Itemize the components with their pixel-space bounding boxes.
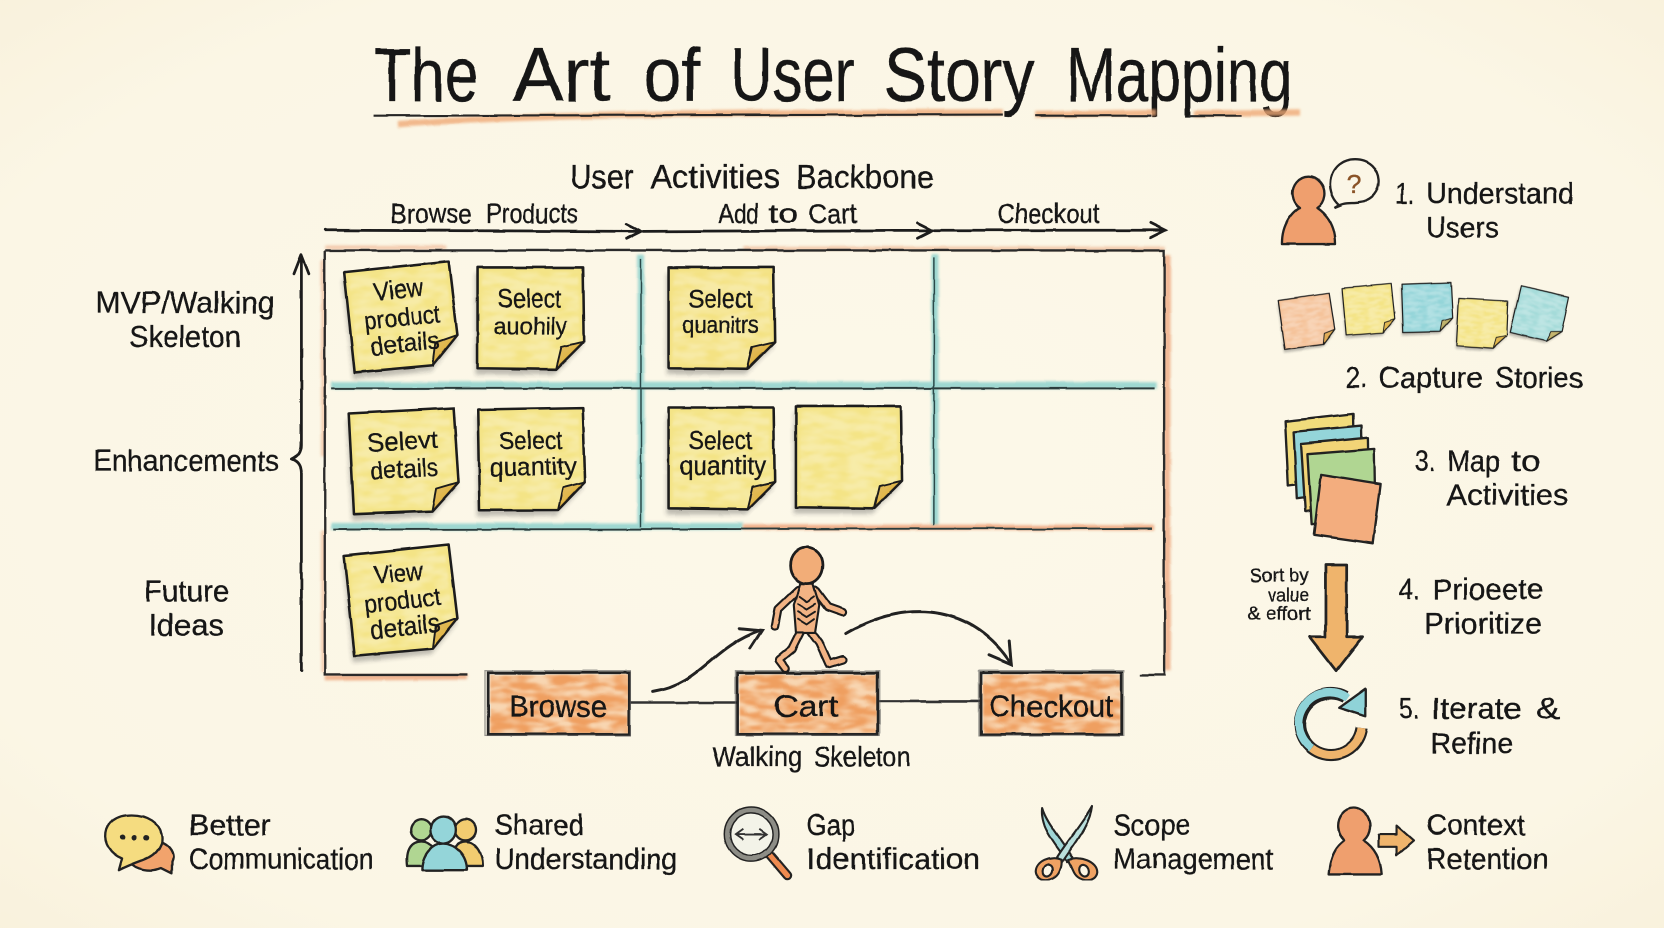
step 4: prioritize: 4.	[1399, 574, 1420, 607]
benefit: shared understanding: Shared	[495, 809, 584, 842]
activity: add to cart: Add	[718, 198, 759, 229]
sticky note: view product details (future): View	[373, 557, 425, 590]
sticky note: view product details	[342, 261, 461, 379]
benefit: shared understanding: Understanding	[495, 843, 677, 876]
step 1: understand users: Users	[1426, 212, 1498, 245]
icon: scissors	[1036, 806, 1097, 880]
walking skeleton: cart	[735, 671, 880, 735]
step 5: iterate and refine	[1299, 689, 1560, 760]
benefit: gap identification	[724, 807, 981, 876]
sticky note: select details: Selevt	[367, 426, 439, 458]
walking skeleton caption: Walking	[712, 741, 802, 772]
step 4: prioritize	[1247, 565, 1543, 671]
sticky note: select quantity: Select	[498, 426, 562, 455]
title underline	[374, 112, 1300, 124]
sticky note: select details	[347, 408, 460, 521]
sticky note: select quantity	[666, 407, 775, 515]
benefit: scope management	[1036, 806, 1274, 880]
walking skeleton: cart: Cart	[774, 688, 839, 723]
walking skeleton caption: Skeleton	[814, 741, 911, 772]
activity: browse products: Browse	[391, 198, 472, 229]
arrow: cart to checkout	[846, 612, 1011, 664]
benefit: context retention: Retention	[1426, 843, 1548, 876]
sticky note: select quantity: quantity	[679, 452, 766, 480]
step 5: iterate and refine: 5.	[1399, 692, 1420, 725]
row label: MVP / walking skeleton: MVP/Walking	[96, 285, 275, 320]
benefit: scope management: Management	[1113, 843, 1274, 876]
walking skeleton: checkout: Checkout	[989, 688, 1114, 723]
sticky note: select quantity (add to cart)	[666, 267, 775, 375]
arrow: browse to cart	[653, 628, 762, 692]
step 1: understand users: Understand	[1426, 178, 1574, 211]
sticky note: select quantity	[476, 408, 586, 517]
step 3: map to activities: to	[1511, 445, 1541, 478]
benefit: gap identification: Gap	[807, 809, 855, 842]
step 2: capture stories: 2.	[1346, 361, 1367, 394]
sticky note: view product details (future): details	[369, 610, 441, 645]
activity: add to cart	[643, 198, 933, 238]
row label: future ideas: Future	[144, 574, 229, 609]
sticky note: select quantity (blurred): auohily	[493, 313, 569, 340]
sticky note: view product details: View	[373, 274, 425, 307]
step 5: iterate and refine: Refine	[1431, 727, 1513, 760]
heading: user activities backbone	[570, 158, 934, 195]
benefit: scope management: Scope	[1113, 809, 1191, 842]
activity: browse products	[325, 198, 641, 239]
icon: person with arrow	[1329, 808, 1414, 874]
activity: add to cart: Cart	[809, 198, 857, 229]
title: Story	[884, 33, 1035, 118]
icon: stack of notes	[1285, 414, 1381, 543]
heading: user activities backbone: Backbone	[796, 158, 934, 195]
activity: checkout	[935, 198, 1165, 238]
benefit: better communication: Communication	[189, 843, 374, 876]
connector line between skeleton steps	[629, 701, 981, 702]
sticky note: select quantity (blurred): Select	[498, 286, 561, 314]
activity: add to cart: to	[768, 198, 798, 229]
sticky note: select quantity: Select	[689, 427, 752, 455]
icon: three people	[407, 816, 483, 870]
story map grid	[323, 247, 1167, 678]
sticky note: select details: details	[369, 454, 439, 485]
step 3: map to activities: Map	[1447, 445, 1501, 478]
side note: sort by value and effort: Sort by	[1250, 565, 1309, 586]
side note: sort by value and effort: & effort	[1247, 603, 1311, 624]
sticky note: select quantity: quantity	[489, 453, 577, 482]
icon: user with question bubble: ?	[1347, 171, 1362, 199]
icon: walking figure	[775, 548, 843, 669]
step 3: map to activities: Activities	[1446, 479, 1568, 512]
row label: MVP / walking skeleton	[96, 285, 275, 354]
sticky note: select quantity (blurred)	[475, 267, 584, 375]
heading: user activities backbone: User	[570, 158, 634, 195]
step 2: capture stories: Capture	[1379, 361, 1484, 394]
walking skeleton: browse: Browse	[509, 688, 607, 723]
benefit: better communication	[105, 809, 374, 876]
benefit: context retention: Context	[1426, 809, 1526, 842]
step 1: understand users	[1282, 159, 1574, 245]
walking skeleton: checkout	[978, 671, 1124, 735]
row label: future ideas: Ideas	[149, 608, 224, 643]
walking skeleton: browse	[485, 671, 630, 735]
icon: row of sticky notes	[1277, 282, 1569, 353]
row label: future ideas	[144, 574, 229, 643]
heading: user activities backbone: Activities	[651, 158, 780, 195]
sticky note: view product details (future): product	[363, 583, 442, 619]
step 5: iterate and refine: Iterate	[1432, 692, 1522, 725]
icon: down arrow	[1310, 565, 1363, 671]
step 2: capture stories	[1277, 282, 1583, 394]
step 2: capture stories: Stories	[1495, 361, 1583, 394]
row label: MVP / walking skeleton: Skeleton	[130, 319, 241, 354]
side note: sort by value and effort	[1247, 565, 1311, 624]
sticky note: blank	[794, 406, 902, 514]
sticky note: select quantity (add to cart): quanitrs	[682, 312, 759, 339]
step 3: map to activities: 3.	[1415, 445, 1436, 478]
step 5: iterate and refine: &	[1536, 692, 1560, 725]
step 4: prioritize: Prioritize	[1424, 608, 1542, 641]
title	[374, 33, 1300, 124]
benefit: shared understanding	[407, 809, 677, 876]
activity: browse products: Products	[486, 198, 578, 229]
step 4: prioritize: Prioeete	[1433, 574, 1543, 607]
icon: user with question bubble	[1282, 159, 1379, 244]
sticky note: select quantity (add to cart): Select	[689, 286, 752, 314]
axis arrow	[292, 255, 309, 671]
benefit: better communication: Better	[189, 809, 271, 842]
row label: enhancements: Enhancements	[93, 443, 279, 478]
title: of	[643, 33, 701, 118]
side note: sort by value and effort: value	[1268, 585, 1308, 606]
icon: magnifying glass	[724, 807, 787, 875]
title: The	[374, 33, 479, 118]
icon: cycle arrow	[1299, 689, 1366, 755]
sticky note: view product details: details	[369, 327, 441, 362]
step 3: map to activities	[1285, 414, 1568, 543]
walking skeleton caption	[712, 741, 911, 772]
benefit: gap identification: Identification	[807, 843, 981, 876]
benefit: context retention	[1329, 808, 1548, 876]
sticky note: view product details (future)	[342, 544, 461, 662]
title: Art	[513, 33, 610, 118]
sticky note: view product details: product	[363, 300, 442, 336]
title: User	[730, 33, 854, 118]
icon: chat bubbles	[105, 815, 173, 873]
title: Mapping	[1067, 33, 1293, 118]
step 1: understand users: 1.	[1395, 178, 1415, 211]
activity: checkout: Checkout	[998, 198, 1100, 229]
